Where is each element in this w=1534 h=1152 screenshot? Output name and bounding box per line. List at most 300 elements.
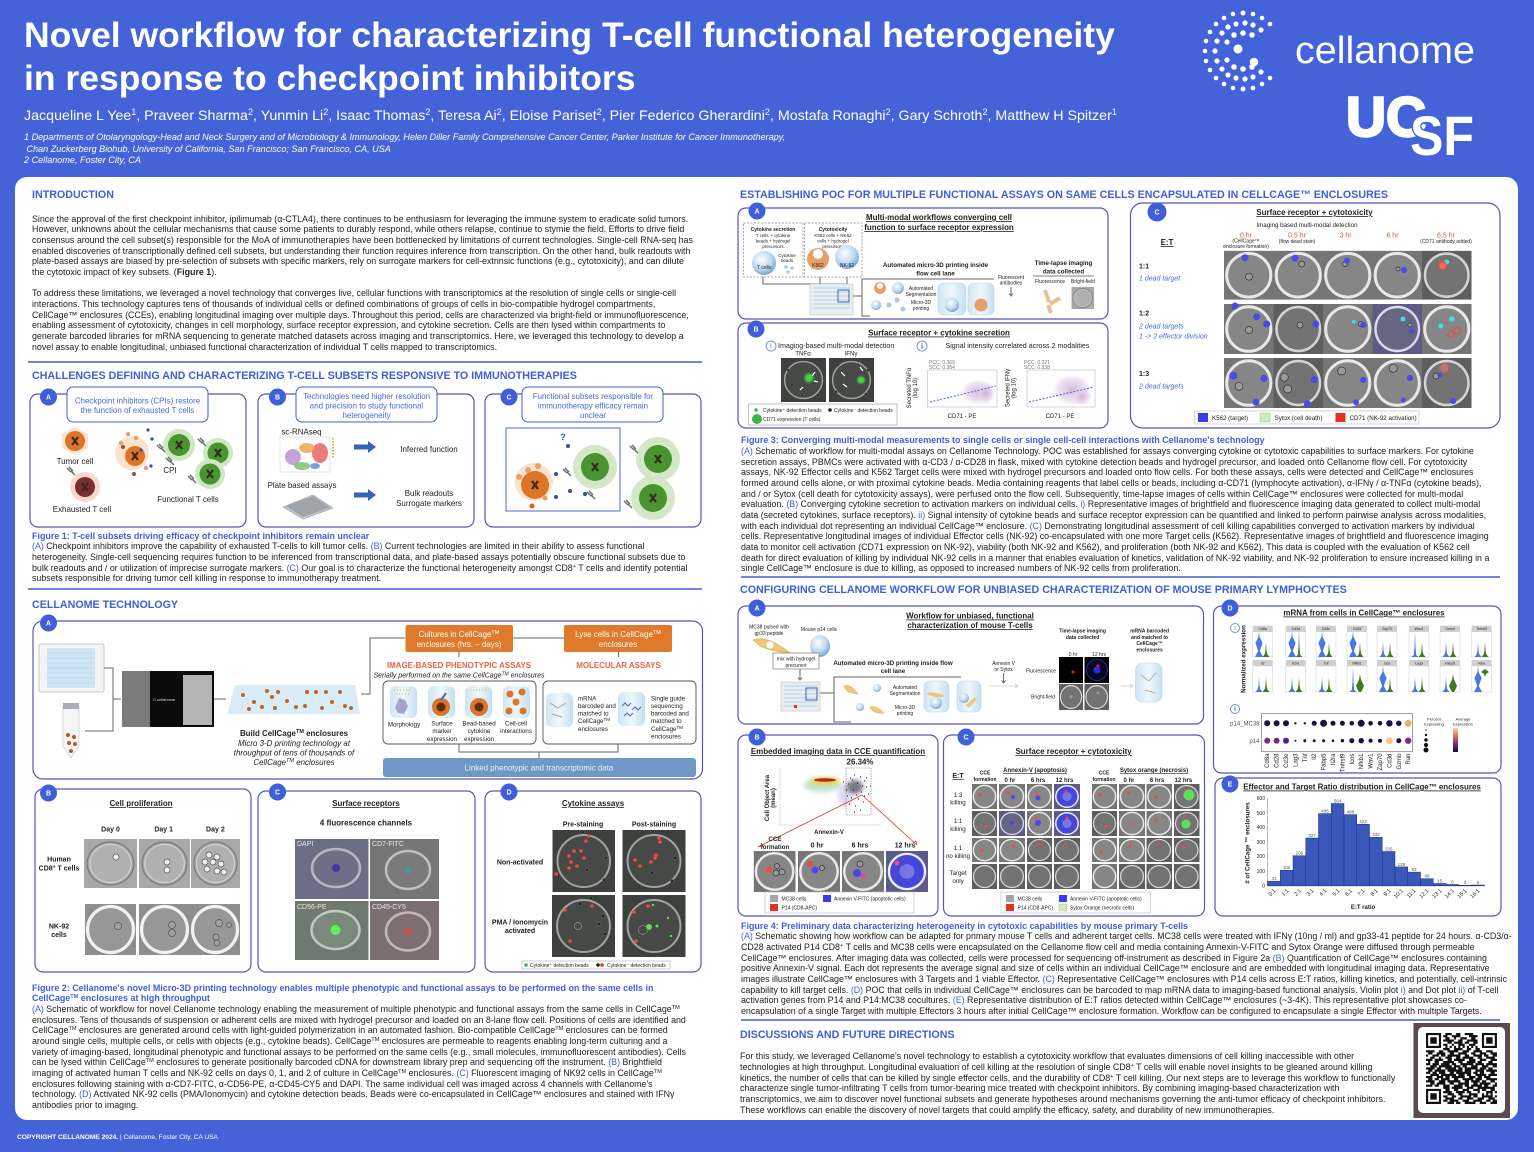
histogram: 6:1 — [1344, 888, 1354, 898]
cytokine bead images — [552, 830, 686, 957]
figure 2 caption: CellCageTM enclosures are generated around cells with light-guided polymerization in an automated fashion. Bio-compatible CellCageTM enclosures can be formed — [32, 1025, 668, 1035]
badge E: E — [1228, 782, 1233, 788]
introduction text: interactions. This technology captures tens of thousands of individual cells or defined combinations of groups of cells in bio-compatible hydrogel compartments, — [32, 299, 655, 309]
badge E — [1222, 776, 1238, 792]
mRNA barcoded: mRNA barcoded — [1130, 628, 1169, 634]
figure 2 caption: technology. (D) Activated NK-92 cells (PMA/Ionomycin) and cytokine detection beads. Beads were co-encapsulated in CellCage™ enclosures and stained with IFNγ — [32, 1089, 674, 1099]
flow cell — [763, 277, 853, 315]
badge C — [500, 388, 518, 406]
time-lapse imaging: Bright-field — [1071, 279, 1095, 285]
row labels: 1:3 — [1139, 371, 1149, 378]
panel 4A: workflow for mouse T-cells — [738, 600, 1204, 724]
panel 3C: surface receptor + cytotoxicity: Surface receptor + cytotoxicity — [1256, 208, 1373, 217]
introduction text — [32, 214, 693, 352]
panel 3A: multi-modal workflows: Multi-modal workflows converging cell — [866, 213, 1012, 222]
dashed box: cytokine secretion: beads — [781, 258, 794, 263]
figure 3 caption: Figure 3: Converging multi-modal measurements to single cells or single cell-cell interactions with Cellanome's technology — [741, 435, 1265, 445]
time headers: (CD71 antibody added) — [1420, 239, 1472, 245]
violin plots: Cd3d — [1292, 627, 1300, 631]
badge D: D — [1227, 606, 1233, 612]
box: molecular assay icons: enclosures — [651, 734, 681, 740]
discussion text: These workflows can enable the discovery of novel targets that could amplify the efficacy, safety, and durability of new immunotherapies. — [740, 1105, 1274, 1115]
badge B — [40, 784, 57, 802]
legend: detection beads: Cytokine⁻ detection beads — [607, 963, 666, 969]
histogram: E:T ratio — [1351, 905, 1375, 911]
histogram: 5:1 — [1332, 888, 1341, 898]
poster title — [24, 15, 1115, 98]
introduction text: However, unknowns about the cellular mechanisms that cause some patients to durably respond, while others relapse, continue to stymie the field. Efforts to drive field — [32, 224, 684, 234]
legend: K562 Sytox CD71: K562 (target) — [1212, 415, 1248, 422]
microprinting lane: Segmentation — [906, 292, 937, 298]
dot plot: Fabp5 — [1322, 753, 1328, 771]
histogram: 3:1 — [1306, 888, 1315, 898]
row labels: 2 dead targets — [1138, 384, 1184, 390]
figure 4 caption: activation genes from P14 and P14:MC38 cocultures. (E) Representative distribution of E:T ratios detected within CellCage™ enclosures (~3-4K). This representative plot showcases co- — [741, 995, 1467, 1005]
image-based assays heading: IMAGE-BASED PHENOTYPIC ASSAYS — [387, 661, 531, 670]
histogram: 3 — [1464, 880, 1467, 885]
marker i — [1230, 624, 1240, 632]
box: molecular assay icons — [543, 681, 696, 744]
badge A: A — [754, 606, 760, 612]
mouse flow cell — [781, 682, 820, 711]
box: image-based assay icons — [383, 681, 536, 744]
flow lines to assays — [361, 638, 618, 758]
figure 3 caption: single CellCage™ enclosure is due to killing, as opposed to increased numbers of NK-92 cells from proliferation. — [741, 563, 1181, 573]
callout: functional subsets: unclear — [580, 411, 606, 420]
poster title: Novel workflow for characterizing T-cell functional heterogeneity — [24, 15, 1115, 55]
dashed box: cytotoxicity: cells + hydrogel — [817, 238, 849, 244]
histogram: 235 — [1385, 846, 1393, 852]
panel 2D: cytokine assays: activated — [505, 928, 535, 935]
figure 1 caption: (A) Checkpoint inhibitors improve the capability of exhausted T-cells to kill tumor cells. (B) Current technologies are limited in their ability to assess functional — [32, 541, 644, 551]
text: build CellCage enclosures — [234, 729, 355, 767]
figure 2 caption: around single cells, multiple cells, or cells with objects (e.g., cytokine beads). CellCageTM enclosures are permeable to reagents enabling long-term culturing and a — [32, 1036, 667, 1046]
fluorescence image grid: CD7-FITC — [372, 841, 404, 848]
enclosure slab with cells — [227, 685, 360, 714]
row labels: 1 dead target — [1139, 276, 1181, 282]
histogram: 2:1 — [1293, 888, 1303, 898]
panel 4B: embedded imaging data: 0 hr — [811, 842, 824, 850]
microprinting lane: Segmentation — [890, 691, 921, 697]
introduction text: enabling assessment of cytotoxicity, changes in cell morphology, surface receptor expression, and cytokine secretion. Cells are then lysed within compartments to — [32, 320, 665, 330]
flow scatter plot — [765, 768, 881, 836]
box: image-based assay icons: interactions — [500, 728, 532, 735]
well plate icon — [283, 495, 333, 519]
panel 1B: technologies: Surrogate markers — [396, 499, 462, 508]
panel 4D: mRNA from cells: mRNA from cells in CellCage™ enclosures — [1283, 608, 1445, 618]
badge B: B — [753, 326, 759, 334]
scatter: IFN vs CD71: SCC: 0.338 — [1024, 365, 1050, 371]
figure 2 caption: enclosures. Tens of thousands of suspension or adherent cells are mixed with hydrogel precursor and loaded on an 8-lane flow cell. Positions of cells are identified and — [32, 1015, 686, 1025]
figure 3 caption: formed around cells alone, or with proximal cytokine beads. Media containing reagents that label cells or beads, including α-CD71 (lymphocyte activation), α-IFNγ / α-TNFα (cytokine beads), — [741, 478, 1481, 488]
mix with hydrogel box: mix with hydrogel — [777, 656, 815, 662]
dot plot: Zap70 — [1378, 753, 1384, 771]
figure 3 caption: with each individual dot representing an individual CellCage™ enclosure. (C) Demonstrating longitudinal assessment of cell killing capabilities converged to activation markers by individual — [741, 521, 1475, 531]
text: build CellCage enclosures: Build CellCage — [240, 729, 296, 738]
text: build CellCage enclosures: Micro 3-D printing technology at — [238, 739, 351, 748]
histogram: 129 — [1398, 862, 1406, 867]
legend: beads and CD71: CD71 expression (T cells) — [763, 417, 821, 423]
row labels: 2 dead targets — [1138, 324, 1184, 330]
badge C — [958, 728, 974, 746]
mix with hydrogel box: precursor — [785, 663, 807, 669]
subheads i and ii: i — [770, 344, 772, 350]
badge C: C — [963, 734, 969, 742]
time headers: 6 hr — [1386, 232, 1399, 240]
panel 1B: technologies — [258, 387, 474, 527]
legend: detection beads: Cytokine⁺ detection beads — [530, 963, 589, 969]
histogram: 600 — [1257, 796, 1265, 802]
figure 2 caption: imaging of activated human T cells and NK-92 cells on days 0, 1, and 2 of culture in CellCageTM enclosures. (C) Fluorescent imaging of NK92 cells in CellCageTM — [32, 1068, 662, 1078]
figure 3 caption: and / or Sytox (cell death for cytotoxicity assays), were perfused onto the flow cell. Subsequently, time-lapse images of cells within CellCage™ enclosures were collected for multi-modal — [741, 489, 1463, 499]
histogram: 100 — [1257, 869, 1265, 875]
legend: detection beads — [522, 961, 670, 969]
histogram: 12:1 — [1419, 888, 1430, 900]
badge C — [269, 784, 286, 800]
dashed box: cytokine secretion: T cells + cytokine — [756, 233, 791, 238]
panel 3C: surface receptor + cytotoxicity: Imaging based multi-modal detection — [1256, 222, 1358, 229]
box: image-based assay icons: Morphology — [388, 722, 421, 728]
violin plots: Gzmb — [1445, 627, 1455, 631]
histogram: 10:1 — [1393, 888, 1405, 900]
dot plot: p14_MC38 — [1230, 722, 1260, 728]
text: build CellCage enclosures: enclosures — [304, 729, 349, 738]
time-lapse image grid — [1224, 251, 1472, 408]
dashed box: cytokine secretion: precursors — [762, 244, 784, 249]
dashed box: cytotoxicity: K562 cells + NK92 — [814, 233, 852, 238]
histogram — [1257, 796, 1486, 911]
bar: linked phenotypic and transcriptomic data — [383, 758, 696, 777]
Annexin or Sytox: Annexin V — [992, 661, 1016, 667]
figure 2 caption — [32, 982, 686, 1110]
dot plot: Ran — [1406, 754, 1412, 765]
affiliations: 1 Departments of Otolaryngology-Head and Neck Surgery and of Microbiology & Immunology, Helen Diller Family Comprehensive Cancer Center, Parker Institute for Cancer Immunotherapy, — [24, 132, 785, 142]
row labels: 1:3 — [954, 792, 963, 799]
row labels — [1138, 264, 1208, 390]
figure 4 caption — [741, 920, 1512, 1016]
dot plot legends — [1424, 716, 1473, 752]
orange box: lyse cells: TM — [653, 630, 661, 636]
badge B — [748, 728, 766, 746]
figure 4 caption: encapsulation of a single Target with multiple Effectors 3 hours after initial CellCage™ enclosure formation. Workflow can be configured to encapsulate a single Effector with multiple Targets. — [741, 1006, 1482, 1016]
dot plot: Cd3d — [1387, 754, 1393, 768]
figure 4 caption: images illustrate CellCage™ enclosures with 3 Targets and 1 viable Effector. (C) Representative CellCage™ enclosures with P14 cells across E:T ratios, killing kinetics, and potentially, cell-intrinsic — [741, 974, 1507, 984]
histogram: 8 — [1451, 880, 1454, 884]
cell inputs: gp33 peptide — [755, 631, 784, 637]
fluorescence image grid: DAPI — [297, 841, 313, 848]
subheads i and ii: ii — [920, 344, 924, 350]
flow scatter plot: Cell Object Area — [765, 774, 771, 821]
row labels: no killing — [946, 853, 971, 860]
violin plots: Cd3e — [1322, 627, 1330, 631]
violin plots: Ran — [1478, 662, 1485, 666]
box: image-based assay icons: Surface — [431, 720, 453, 728]
dot plot — [1230, 714, 1412, 772]
dashed box: cytokine secretion: T cells — [757, 265, 772, 271]
legend: beads and CD71 — [748, 404, 897, 425]
orange box: cultures: enclosures (hrs. – days) — [417, 640, 502, 649]
column heads: 6 hrs — [1031, 778, 1046, 784]
legend: K562 Sytox CD71: CD71 (NK-92 activation) — [1350, 415, 1417, 422]
figure 4 caption: (A) Schematic showing how workflow can be adapted for primary mouse T cells and adherent target cells. MC38 cells were treated with IFNγ (10ng / ml) and gp33-41 peptide for 24 hours. α-CD3/α- — [741, 931, 1512, 941]
orange box: lyse cells — [564, 625, 672, 652]
callout: functional subsets: Functional subsets responsible for — [533, 392, 654, 401]
scatter: TNF vs CD71: CD71 - PE — [948, 414, 976, 420]
callout: higher resolution: heterogeneity — [342, 411, 391, 420]
dot plot legends: Expressing — [1424, 722, 1444, 726]
orange box: cultures: TM — [491, 630, 500, 636]
QR code — [1414, 1023, 1510, 1118]
figure 1 caption: Figure 1: T-cell subsets driving efficacy of checkpoint inhibitors remain unclear — [32, 530, 369, 540]
dot plot: Il2 — [1312, 753, 1318, 760]
violin plots: Cd8a — [1259, 627, 1267, 631]
figure 3 caption: (A) Schematic of workflow for multi-modal assays on Cellanome Technology. POC was established for assays converging cytokine or cytotoxic capabilities to surface markers. For cytokine — [741, 446, 1474, 456]
marker ii — [1230, 704, 1240, 714]
figure 2 caption: antibodies prior to imaging. — [32, 1100, 138, 1110]
mRNA barcoded: enclosures — [1136, 648, 1163, 654]
column heads: 6 hrs — [1150, 778, 1165, 784]
figure 3 caption — [741, 435, 1490, 573]
scatter: TNF vs CD71: (log 10) — [913, 378, 919, 398]
panel 4B: embedded imaging data: 6 hrs — [852, 842, 868, 850]
badge B — [269, 388, 286, 406]
box: molecular assay icons: sequencing — [651, 703, 683, 710]
introduction text: Since the approval of the first checkpoint inhibitor, ipilimumab (α-CTLA4), there continues to be enthusiasm for leveraging the immune system to eradicate solid tumors. — [32, 214, 688, 224]
histogram: 495 — [1321, 808, 1329, 814]
violin plots: Nfkb1 — [1352, 662, 1362, 666]
histogram: 488 — [1347, 810, 1355, 814]
panel 2C: surface receptors: Surface receptors — [332, 799, 400, 808]
subheads i and ii: Signal intensity correlated across 2 modalities — [946, 342, 1090, 350]
dot plot legends: Average — [1456, 716, 1471, 722]
mRNA barcoded: and matched to — [1131, 635, 1168, 641]
microprinting lane: printing — [897, 711, 913, 717]
callout: CPIs restore function: Checkpoint inhibitors (CPIs) restore — [75, 396, 201, 406]
dashed box: cytotoxicity: precursors — [822, 244, 844, 249]
panel 2C: surface receptors — [258, 784, 475, 972]
box: image-based assay icons: expression — [427, 736, 458, 743]
legend: MC38 cells — [782, 896, 807, 902]
callout: higher resolution: and precision to study functional — [310, 402, 423, 410]
figure 2 caption: variety of imaging-based, longitudinal phenotypic and functional assays to be performed on the same cells (e.g., small molecules, immunofluorescent antibodies). Cells — [32, 1047, 686, 1057]
histogram: 0 — [1262, 884, 1265, 890]
panel 3A: multi-modal workflows: function to surface receptor expression — [864, 223, 1014, 232]
cell inputs: MC38 pulsed with — [749, 624, 789, 630]
time-lapse imaging: data collected — [1043, 268, 1084, 276]
introduction text: generate barcoded libraries for mRNA sequencing to generate matched datasets across imaging and transcriptomics. Here, we leveraged this technology to develop a — [32, 331, 684, 341]
badge B: B — [754, 734, 760, 742]
box: molecular assay icons: barcoded and — [651, 710, 689, 718]
time-lapse fluorescence images — [1026, 628, 1109, 710]
text: build CellCage enclosures: CellCage — [253, 758, 286, 767]
callout: CPIs restore function: the function of exhausted T cells — [81, 406, 194, 415]
fluorescent antibodies: Fluorescent — [998, 275, 1025, 281]
time headers: (CellCage™ — [1232, 238, 1260, 244]
discussion text: kinetics, the number of cells that can be killed by single effector cells, and the durability of CD8+ T cell killing. Our next steps are to leverage this workflow to functionally — [740, 1073, 1395, 1083]
marker i: i — [1234, 626, 1236, 632]
panel 2B: cell proliferation: T cells — [56, 866, 79, 872]
box: image-based assay icons: marker — [432, 728, 452, 735]
row labels: 1:2 — [1139, 310, 1149, 318]
box: molecular assay icons: matched to — [578, 710, 609, 718]
histogram: 9:1 — [1383, 888, 1392, 898]
fluorescent antibodies — [998, 275, 1025, 296]
instrument: C cellanome — [153, 697, 176, 702]
badge C: C — [506, 394, 512, 402]
violin plots: Fabp5 — [1445, 662, 1455, 666]
panel 3C: surface receptor + cytotoxicity: E:T — [1161, 238, 1174, 247]
mix with hydrogel box — [773, 653, 819, 680]
discussion text: technologies at high throughput. Longitudinal evaluation of cell killing at the resolution of single CD8+ T cells will enable novel insights to be gleaned around killing — [740, 1062, 1372, 1072]
violin plots: Tnf — [1323, 662, 1329, 666]
figure 2 caption: Figure 2: Cellanome's novel Micro-3D printing technology enables multiple phenotypic and functional assays to be performed on the same cells in — [32, 982, 653, 992]
scatter: IFN vs CD71 — [1006, 360, 1095, 420]
dot plot legends: Percent — [1427, 716, 1442, 722]
figure 4 caption: Figure 4: Preliminary data characterizing heterogeneity in cytotoxic capabilities by mouse primary T-cells — [741, 920, 1188, 930]
introduction text: novel assay to enable longitudinal, unbiased functional characterization of individual T cells mapped to transcriptomics. — [32, 342, 497, 352]
row labels: 1:1 — [954, 818, 963, 825]
histogram: 0:1 — [1268, 888, 1277, 898]
dashed box: cytokine secretion: Cytokine — [778, 253, 796, 258]
legend: K562 Sytox CD71 — [1194, 411, 1419, 424]
histogram: 5 — [1477, 880, 1480, 885]
column heads: 0 hr — [1004, 778, 1016, 784]
row labels: 1:1 — [1139, 264, 1149, 270]
affiliations — [24, 132, 785, 165]
time headers: 0.5 hr — [1288, 232, 1307, 240]
column heads: CCE — [1099, 770, 1110, 776]
row labels: Target — [949, 870, 967, 877]
callout: higher resolution — [296, 387, 437, 422]
dashed box: cytokine secretion: Cytokine secretion — [751, 227, 795, 233]
image-based assays heading — [373, 661, 545, 680]
dot plot: Gzmb — [1397, 753, 1403, 770]
panel 3B: surface receptor + cytokine secretion: TNFα — [795, 350, 811, 358]
histogram: 106 — [1283, 865, 1291, 870]
histogram: 11:1 — [1406, 888, 1417, 900]
panel 2D: cytokine assays: Pre-staining — [563, 822, 603, 828]
violin plots: Zap70 — [1382, 627, 1392, 631]
figure 3 caption: assays, NK-92 Effector cells and K562 Target cells were mixed with hydrogel precursors and loaded onto flow cells. For both these assays, cells were detected and CellCage™ enclosures — [741, 467, 1473, 477]
dashed box: cytotoxicity: NK-92 — [840, 263, 854, 269]
histogram: 332 — [1372, 832, 1380, 837]
time headers: 6.5 hr — [1437, 232, 1456, 240]
box: image-based assay icons: Cell-cell — [505, 720, 527, 728]
dashed box: cytotoxicity — [804, 223, 862, 277]
violin plots: Icos — [1384, 662, 1390, 666]
affiliations: Chan Zuckerberg Biohub, University of California, San Francisco; San Francisco, CA, USA — [27, 144, 391, 154]
time-lapse fluorescence images: 0 hr — [1069, 652, 1078, 658]
panel 2D: cytokine assays: Non-activated — [497, 860, 543, 866]
panel 4D: mRNA from cells — [1214, 600, 1501, 773]
legend: Annexin V-FITC (apoptotic cells) — [834, 896, 906, 902]
discussion text: transcriptomics, we aim to discover novel functional subsets and generate hypotheses around mechanisms governing the anti-tumor efficacy of checkpoint inhibitors. — [740, 1094, 1385, 1104]
heading: introduction: INTRODUCTION — [32, 189, 114, 201]
badge B: B — [46, 790, 51, 798]
dot plot: Nfkb1 — [1359, 753, 1365, 769]
legend: K562 Sytox CD71: Sytox (cell death) — [1275, 415, 1322, 422]
introduction text: the cytotoxic impact of key subsets. (Figure 1). — [32, 267, 217, 277]
badge A: A — [46, 620, 51, 628]
footer copyright: COPYRIGHT CELLANOME 2024. | Cellanome, Foster City, CA USA — [17, 1134, 218, 1141]
subheads i and ii — [766, 341, 1090, 351]
time-lapse fluorescence images: Time-lapse imaging — [1059, 628, 1106, 634]
microprinting lane: Micro-3D — [895, 705, 916, 711]
scatter: IFN vs CD71: CD71 - PE — [1046, 414, 1074, 420]
histogram: 300 — [1257, 840, 1265, 846]
column heads: E:T — [952, 773, 964, 780]
row labels: 1 -> 2 effector division — [1139, 334, 1208, 340]
cell inputs: Mouse p14 cells — [801, 627, 838, 633]
panel 1A: checkpoint inhibitors: CPI — [163, 466, 177, 475]
microprinting lane: Micro-3D — [911, 300, 932, 306]
flow scatter plot: (mean) — [771, 788, 777, 808]
heading: challenges: CHALLENGES DEFINING AND CHARACTERIZING T-CELL SUBSETS RESPONSIVE TO IMMUNOTHERAPIES — [32, 370, 577, 382]
badge D — [1222, 600, 1238, 616]
logo: UCSF: UC — [1346, 85, 1426, 148]
dot plot: Tnfrsf9 — [1340, 753, 1346, 772]
logo: cellanome wordmark: cellanome — [1295, 30, 1475, 72]
scatter: IFN vs CD71: (log 10) — [1012, 378, 1018, 398]
Annexin or Sytox — [990, 661, 1018, 688]
time-lapse fluorescence images: Fluorescence — [1026, 668, 1056, 674]
introduction text: consensus around the cell subset(s) responsible for the MoA of immunotherapies have been bottlenecked by limitations of current technologies. Single-cell RNA-seq has — [32, 235, 693, 245]
histogram: 14:1 — [1444, 888, 1456, 900]
figure 1 caption — [32, 530, 687, 583]
tumor cell icon — [62, 427, 88, 455]
box: molecular assay icons: enclosures — [578, 726, 608, 733]
box: molecular assay icons: CellCage — [651, 726, 676, 733]
introduction text: To address these limitations, we leveraged a novel technology that converges live, cellular functions with transcriptomics at the resolution of single cells or single-cell — [32, 288, 676, 298]
question box with tumor killing — [506, 428, 620, 511]
badge B: B — [275, 394, 280, 402]
discussion text — [740, 1051, 1396, 1115]
column heads: 0 hr — [1123, 778, 1135, 784]
panel 4A: workflow for mouse T-cells: characterization of mouse T-cells — [907, 621, 1033, 630]
logo: cellanome dot mark — [1203, 11, 1272, 91]
column heads: formation — [1092, 777, 1116, 783]
panel 3B: surface receptor + cytokine secretion — [738, 320, 1108, 428]
panel 4D: mRNA from cells: Normalized expression — [1240, 625, 1248, 693]
callout: functional subsets: immunotherapy efficacy remain — [538, 402, 648, 410]
scatter: IFN vs CD71: PCC: 0.321 — [1024, 360, 1050, 366]
molecular assays heading: MOLECULAR ASSAYS — [576, 661, 661, 670]
dashed box: cytotoxicity: Cytotoxicity — [819, 227, 848, 233]
panel 2B: cell proliferation: cells — [51, 932, 67, 939]
panel 2D: cytokine assays: Cytokine assays — [562, 799, 625, 808]
panel 4B: embedded imaging data — [738, 728, 938, 916]
panel 2B: cell proliferation: Cell proliferation — [109, 799, 173, 808]
violin plots: Il2ra — [1292, 662, 1299, 666]
histogram: 48 — [1424, 874, 1430, 878]
histogram: 15:1 — [1457, 888, 1468, 900]
figure 2 caption: enclosures following staining with α-CD7-FITC, α-CD56-PE, α-CD45-CY5 and DAPI. The same individual cell was imaged across 4 channels with Cellanome's — [32, 1079, 653, 1089]
histogram: 7:1 — [1357, 888, 1366, 898]
panel 1C: functional subsets — [485, 387, 701, 527]
legend: beads and CD71: Cytokine⁻ detection beads — [834, 408, 893, 414]
histogram: 422 — [1359, 819, 1367, 824]
box: image-based assay icons: cytokine — [468, 728, 491, 735]
figure 3 caption: data to monitor cell activation (CD71 expression on NK-92), viability (both NK-92 and K562), and proliferation (both NK-92 and K562). This data is coupled with the evaluation of K562 cell — [741, 542, 1470, 552]
marker ii: ii — [1234, 707, 1236, 713]
badge A — [40, 388, 57, 406]
functional T cells right — [624, 437, 680, 520]
time headers: enclosure formation) — [1223, 244, 1269, 250]
fluorescence image grid: CD45-CY5 — [372, 904, 406, 911]
scatter: IFN vs CD71: Secreted IFNγ — [1006, 369, 1012, 407]
image-based assays heading: Serially performed on the same CellCage — [373, 672, 501, 680]
figure 3 caption: data (secreted cytokines, surface receptors). ii) Signal intensity of cytokine beads and surface receptor expression can be quantified and linked to perform pairwise analysis across modalities, — [741, 510, 1486, 520]
